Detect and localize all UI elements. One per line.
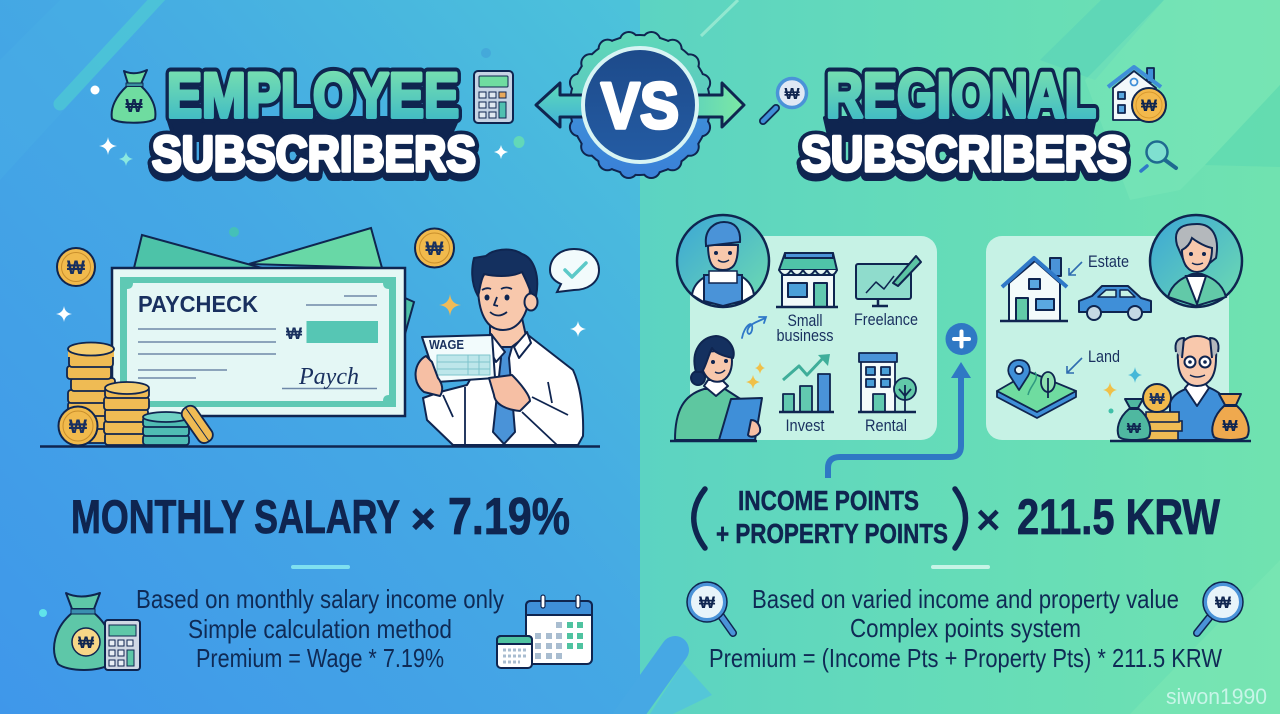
open bracket bbox=[694, 489, 705, 548]
regional line 2: Complex points system bbox=[850, 613, 1081, 643]
icon: magnifier lower left: ₩ bbox=[699, 593, 716, 612]
icon: magnifier with won (title right) bbox=[763, 78, 806, 121]
collar bbox=[487, 332, 531, 362]
coin: right bbox=[1143, 384, 1171, 412]
money bag: green: ₩ bbox=[1127, 420, 1142, 437]
watermark: siwon1990 bbox=[1166, 684, 1267, 709]
icon: house bbox=[1000, 258, 1068, 321]
formula part: times: × bbox=[411, 495, 436, 542]
description: regional bbox=[709, 584, 1222, 673]
icon: calculator (title left) bbox=[474, 71, 513, 123]
panel: income types bbox=[690, 236, 937, 440]
arrow: flow to plus bbox=[828, 362, 971, 478]
icon: money bag (title left): ₩ bbox=[126, 96, 142, 116]
label: freelance: Freelance bbox=[854, 311, 918, 329]
title word: subscribers right: SUBSCRIBERS bbox=[801, 126, 1127, 182]
icon: small magnifier (title right) bbox=[1141, 142, 1176, 171]
title backing outline bbox=[152, 61, 476, 186]
won sign on cheque: ₩ bbox=[286, 324, 303, 343]
green banknotes behind cheque bbox=[134, 228, 414, 334]
coin stack: teal bbox=[143, 412, 189, 445]
coin: stack front bbox=[58, 406, 98, 446]
right title backing outline: SUBSCRIBERS bbox=[801, 130, 1127, 186]
icon: money bag lower bbox=[54, 593, 113, 670]
illustration: paycheck scene bbox=[40, 228, 600, 446]
person: woman with tablet bbox=[670, 336, 762, 441]
hair bbox=[472, 250, 537, 296]
title: regional subscribers bbox=[801, 61, 1127, 186]
shirt creases bbox=[443, 382, 568, 445]
label: estate with arrow bbox=[1069, 253, 1129, 275]
icon: magnifier lower left bbox=[687, 582, 733, 633]
money: gold stack bbox=[1146, 412, 1182, 440]
formula part: property points: + PROPERTY POINTS bbox=[716, 518, 948, 549]
icon: magnifier lower right: ₩ bbox=[1215, 593, 1232, 612]
coin: upper left bbox=[57, 248, 95, 286]
scalloped outer seal bbox=[569, 34, 711, 176]
regional line 1: Based on varied income and property value bbox=[752, 584, 1179, 614]
label: small business: business bbox=[776, 327, 834, 345]
formula part: income points: INCOME POINTS bbox=[738, 485, 919, 516]
formula part: rate: 7.19% bbox=[448, 488, 570, 546]
vs text: VS bbox=[601, 69, 679, 142]
label: land with arrow bbox=[1067, 348, 1120, 373]
signature: Paych bbox=[298, 364, 359, 390]
vs inner disc bbox=[583, 48, 697, 162]
right title backing outline bbox=[801, 61, 1127, 186]
formula part: salary: MONTHLY SALARY bbox=[71, 490, 400, 543]
icon: house with coin (title right) bbox=[1108, 67, 1166, 122]
description: employee bbox=[136, 584, 504, 673]
formula part: amount: 211.5 KRW bbox=[1017, 489, 1221, 545]
right title backing outline: REGIONAL bbox=[826, 61, 1096, 131]
icon: magnifier with won (title right): ₩ bbox=[784, 86, 800, 103]
divider left bbox=[291, 565, 350, 569]
icon: small calendar bbox=[497, 636, 532, 668]
icon: freelance monitor bbox=[856, 256, 921, 306]
dot teal right bbox=[1108, 408, 1114, 414]
icon: invest chart bbox=[779, 354, 834, 412]
neck bbox=[490, 318, 526, 352]
title word: regional: REGIONAL bbox=[826, 61, 1096, 131]
formula: points bbox=[694, 485, 1221, 549]
vs badge bbox=[536, 34, 744, 176]
ground line bbox=[40, 445, 600, 448]
title backing outline: EMPLOYEE bbox=[167, 61, 459, 131]
leaning coin bbox=[179, 403, 216, 446]
arrow: pointing right bbox=[660, 83, 744, 127]
ear bbox=[524, 294, 538, 310]
icon: calculator lower bbox=[105, 620, 140, 670]
description line 2: Simple calculation method bbox=[188, 614, 452, 644]
head bbox=[478, 268, 530, 330]
money bag: orange bbox=[1212, 394, 1249, 440]
coin: right: ₩ bbox=[1149, 391, 1165, 408]
sparkle gold right bbox=[1103, 382, 1117, 398]
sparkle gold 1 bbox=[746, 375, 760, 389]
icon: magnifier lower right bbox=[1197, 582, 1243, 633]
sparkle white right bbox=[570, 321, 586, 337]
description line 3: Premium = Wage * 7.19% bbox=[196, 643, 444, 673]
right title backing outline: SUBSCRIBERS bbox=[801, 127, 1127, 183]
face details bbox=[484, 294, 510, 300]
icon: house with coin (title right): ₩ bbox=[1141, 96, 1158, 115]
speech bubble with check bbox=[550, 249, 599, 292]
close bracket bbox=[955, 489, 966, 548]
sparkle white left bbox=[56, 306, 72, 322]
plus badge bbox=[946, 323, 978, 355]
sparkles around left title bbox=[90, 86, 524, 166]
sparkle gold bbox=[439, 294, 461, 316]
panel: property types bbox=[986, 236, 1229, 440]
label: estate with arrow: Estate bbox=[1088, 253, 1129, 271]
title backing outline: SUBSCRIBERS bbox=[152, 127, 476, 183]
background: left panel bbox=[0, 0, 640, 714]
formula part: times right: × bbox=[976, 496, 1001, 543]
title backing outline: SUBSCRIBERS bbox=[152, 130, 476, 186]
icon: large calendar bbox=[526, 595, 592, 664]
label: land with arrow: Land bbox=[1088, 348, 1120, 366]
arrow: pointing left bbox=[536, 83, 620, 127]
icon: land plot with pin bbox=[997, 360, 1076, 418]
description line 1: Based on monthly salary income only bbox=[136, 584, 504, 614]
title: employee subscribers bbox=[152, 61, 476, 186]
icon: small business store bbox=[776, 253, 838, 307]
coin: upper right bbox=[415, 228, 454, 268]
wage card bbox=[422, 335, 495, 382]
avatar: worker in apron bbox=[677, 215, 769, 307]
title word: subscribers: SUBSCRIBERS bbox=[152, 126, 476, 182]
ground line right bbox=[1110, 440, 1251, 442]
paycheck card bbox=[112, 268, 405, 416]
wage card: WAGE bbox=[429, 338, 464, 352]
background: right panel bbox=[640, 0, 1280, 714]
label: invest: Invest bbox=[786, 417, 825, 435]
tie bbox=[493, 347, 515, 444]
coin stack: short bbox=[104, 382, 149, 445]
hands bbox=[416, 356, 442, 396]
icon: money bag lower: ₩ bbox=[78, 633, 95, 652]
icon: car bbox=[1079, 286, 1151, 320]
amount box bbox=[306, 321, 378, 343]
avatar: older woman bbox=[1150, 215, 1242, 307]
money bag: green bbox=[1118, 399, 1150, 440]
person: older man with money bbox=[1170, 336, 1226, 440]
sparkle blue right bbox=[1128, 367, 1142, 383]
divider right bbox=[931, 565, 990, 569]
coin stack: tall bbox=[67, 342, 115, 443]
money bag: orange: ₩ bbox=[1222, 418, 1238, 435]
sparkle gold 2 bbox=[755, 362, 765, 374]
paycheck label: PAYCHECK bbox=[138, 291, 258, 317]
person: employee bbox=[416, 250, 583, 445]
coin: stack front: ₩ bbox=[69, 417, 87, 438]
icon: money bag (title left) bbox=[112, 70, 155, 123]
shirt and sleeves bbox=[423, 335, 583, 445]
label: small business: Small bbox=[788, 312, 822, 330]
title word: employee: EMPLOYEE bbox=[167, 61, 459, 131]
icon: rental building bbox=[858, 353, 916, 412]
coin: upper right: ₩ bbox=[426, 239, 444, 260]
coin: upper left: ₩ bbox=[67, 258, 85, 279]
formula: monthly salary bbox=[71, 488, 570, 546]
label: rental: Rental bbox=[865, 417, 907, 435]
icon: squiggle arrow bbox=[742, 317, 766, 338]
